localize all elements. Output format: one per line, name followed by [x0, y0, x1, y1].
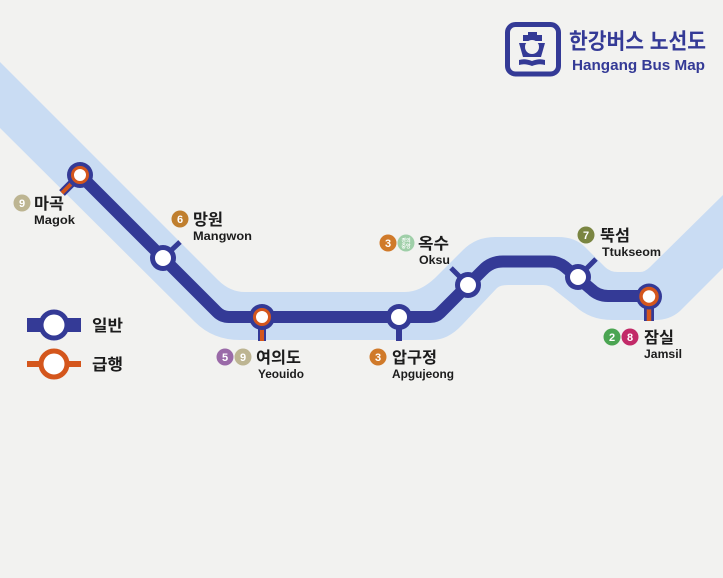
station: Apgujeong: 압구정	[392, 349, 437, 367]
legend: express service	[27, 351, 123, 377]
legend: regular service	[27, 310, 123, 340]
title	[569, 29, 706, 74]
station: Mangwon: Mangwon	[193, 231, 252, 243]
station: Jamsil: 8	[627, 332, 633, 344]
station: Apgujeong: 3	[375, 352, 381, 364]
title: Hangang Bus Map	[572, 57, 705, 74]
station: Mangwon: 6	[177, 214, 183, 226]
station: Yeouido: Yeouido	[258, 369, 304, 381]
station: Apgujeong	[370, 304, 454, 381]
station: Magok: 마곡	[34, 195, 64, 213]
station: Ttukseom: 7	[583, 230, 589, 242]
station: Yeouido	[216, 304, 304, 381]
station: Oksu: 옥수	[418, 235, 449, 253]
station: Oksu: 경의	[401, 237, 411, 244]
station: Jamsil: 2	[609, 332, 615, 344]
bus route line	[80, 175, 649, 317]
station: Magok: Magok	[34, 215, 76, 227]
station: Oksu: Oksu	[419, 255, 450, 267]
station: Yeouido: 9	[240, 352, 246, 364]
river band	[0, 62, 723, 340]
station: Oksu: 3	[385, 238, 391, 250]
station: Ttukseom: 뚝섬	[600, 227, 630, 245]
station: Magok	[14, 162, 93, 227]
icon: ferry logo	[508, 24, 558, 74]
station: Yeouido: 여의도	[256, 349, 301, 367]
station: Yeouido: 5	[222, 352, 228, 364]
station: Oksu	[380, 234, 481, 298]
station: Jamsil: Jamsil	[644, 349, 682, 361]
legend: express service: 급행	[92, 355, 123, 374]
station: Jamsil: 잠실	[644, 329, 674, 347]
station: Mangwon: 망원	[193, 211, 223, 229]
station: Jamsil	[604, 284, 682, 361]
station: Magok: 9	[19, 198, 25, 210]
station: Oksu: 중앙	[401, 243, 411, 250]
station: Ttukseom	[565, 226, 661, 290]
legend: regular service: 일반	[92, 317, 123, 335]
station: Ttukseom: Ttukseom	[602, 247, 661, 259]
title: 한강버스 노선도	[569, 29, 706, 54]
station: Mangwon	[150, 210, 252, 271]
station: Apgujeong: Apgujeong	[392, 369, 454, 381]
